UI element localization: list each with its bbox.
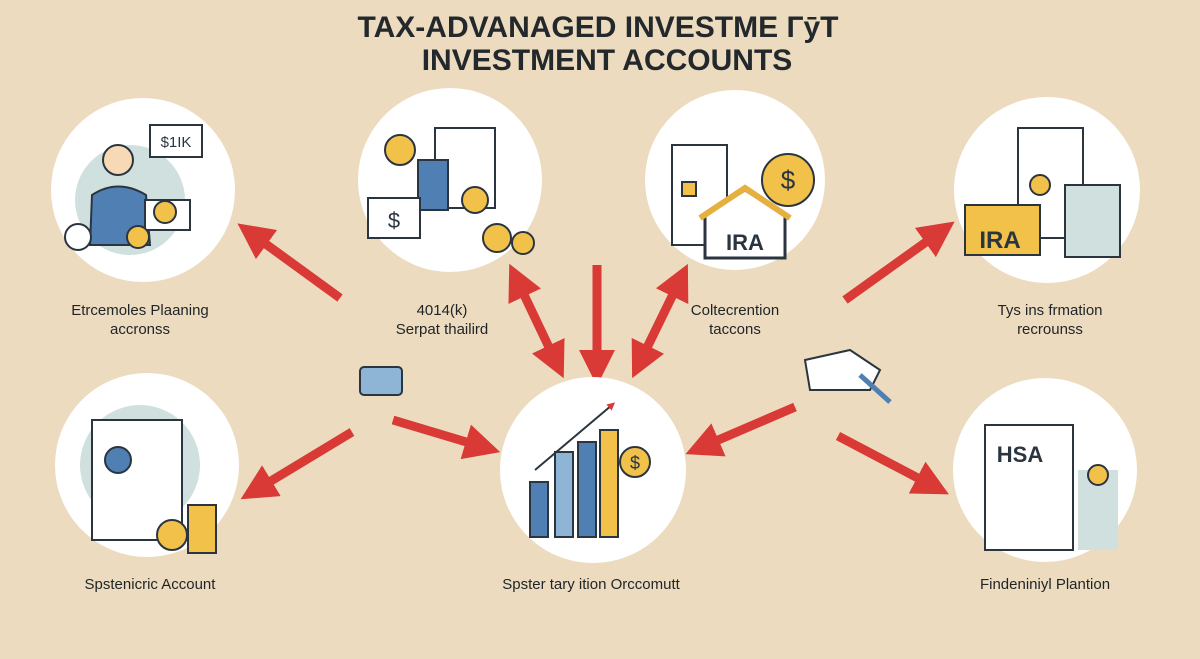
panel: circle 3: $	[781, 165, 796, 195]
panel: circle 4	[954, 97, 1140, 283]
panel: circle 3	[645, 90, 825, 270]
title: TAX-ADVANAGED INVESTME ГӯТ	[358, 11, 838, 44]
panel: circle 5	[55, 373, 239, 557]
labels: 4014(k)	[417, 302, 467, 319]
panel: circle 7	[953, 378, 1137, 562]
panel: circle 6 center: $	[630, 453, 640, 473]
title	[358, 11, 838, 77]
labels: recrounss	[1017, 321, 1083, 338]
labels: taccons	[709, 321, 761, 338]
labels: Etrcemoles Plaaning	[71, 302, 209, 319]
labels: Serpat thailird	[396, 321, 488, 338]
title: INVESTMENT ACCOUNTS	[422, 44, 792, 77]
panel: circle 6 center	[500, 377, 686, 563]
labels: Coltecrention	[691, 302, 779, 319]
labels: Spster tary ition Orccomutt	[502, 576, 681, 593]
panel: circle 1	[51, 98, 235, 282]
labels	[71, 302, 1110, 593]
arrows	[252, 232, 940, 490]
labels: Tys ins frmation	[997, 302, 1103, 319]
labels: accronss	[110, 321, 170, 338]
panel: circle 4: IRA	[979, 227, 1021, 254]
icon: checkbox	[360, 367, 402, 395]
panel: circle 7: HSA	[997, 442, 1043, 467]
panel: circle 3: IRA	[726, 230, 764, 255]
panel: circle 2	[358, 88, 542, 272]
labels: Findeniniyl Plantion	[980, 576, 1110, 593]
panel: circle 2: $	[388, 208, 400, 233]
panel: circle 1: $1IK	[161, 134, 191, 151]
icon: hand tool	[805, 350, 890, 402]
labels: Spstenicric Account	[85, 576, 216, 593]
